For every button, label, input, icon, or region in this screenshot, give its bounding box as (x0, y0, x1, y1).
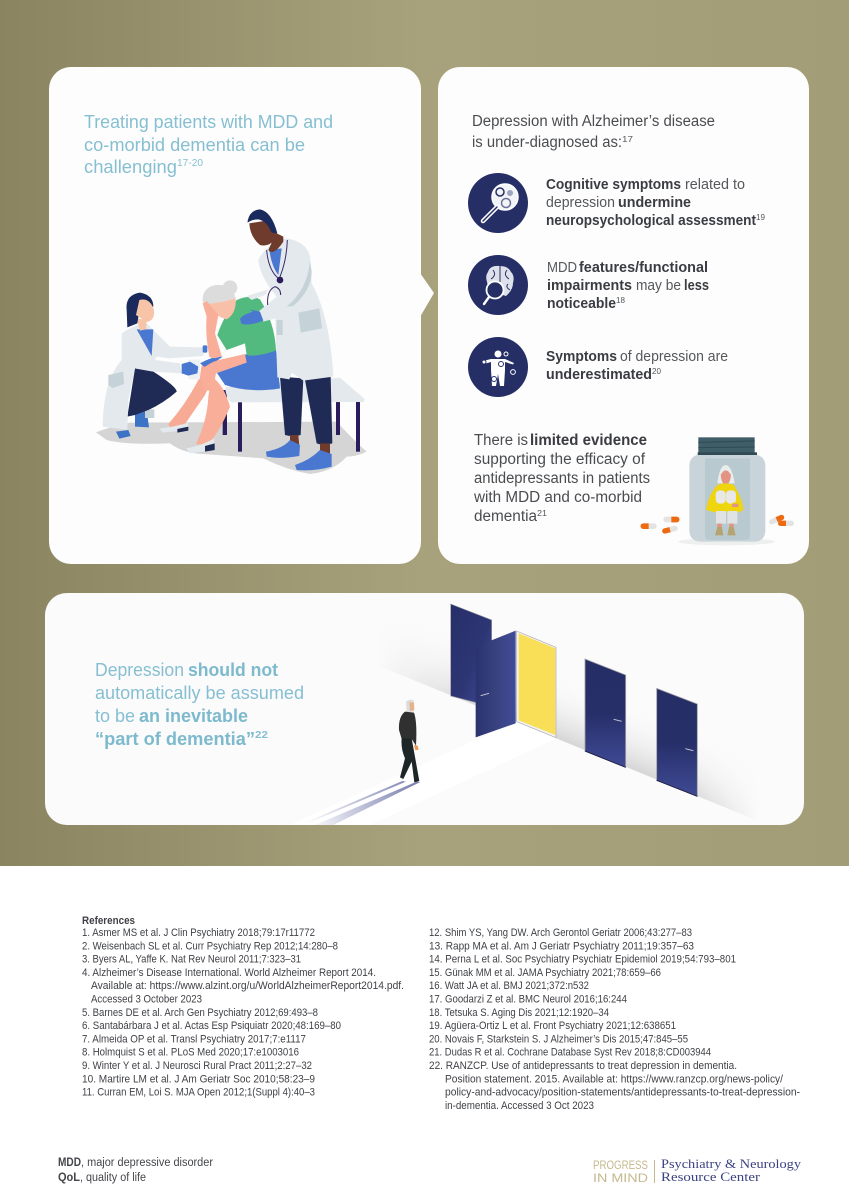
text: MDD features: noticeable (547, 296, 616, 312)
logo: Progress in Mind: IN MIND (593, 1173, 648, 1185)
references: right column: in-dementia. Accessed 3 Oct 2023 (445, 1100, 594, 1112)
heading: treating patients (84, 111, 333, 177)
panel: under-diagnosis (438, 67, 809, 564)
references: right column: 17. Goodarzi Z et al. BMC Neurol 2016;16:244 (429, 994, 627, 1006)
references: left column: 6. Santabárbara J et al. Actas Esp Psiquiatr 2020;48:169–80 (82, 1020, 341, 1032)
text: symptoms underestimated: Symptoms (546, 349, 617, 365)
text: symptoms underestimated: underestimated (546, 367, 652, 383)
text: limited evidence (473, 432, 650, 525)
heading: under-diagnosed: Depression with Alzheimer’s disease (472, 113, 715, 130)
references: left column: Available at: https://www.alzint.org/u/WorldAlzheimerReport2014.pdf. (91, 980, 404, 992)
references: right column: 15. Günak MM et al. JAMA Psychiatry 2021;78:659–66 (429, 967, 661, 979)
text: MDD features: less (684, 278, 709, 294)
illustration: person in a pill jar (640, 437, 794, 545)
heading: inevitable part of dementia: automatically be assumed (95, 682, 304, 703)
text: MDD features: MDD (547, 260, 577, 276)
icon: magnifier over cognition (468, 173, 528, 233)
abbreviations: , quality of life (80, 1172, 146, 1184)
text: cognitive symptoms: 19 (756, 212, 765, 222)
heading: inevitable part of dementia (95, 659, 304, 749)
logo: Progress in Mind (593, 1157, 802, 1185)
text: limited evidence: 21 (537, 508, 547, 518)
illustration: doctors comforting a patient (96, 209, 367, 474)
text: limited evidence: supporting the efficacy of (474, 451, 646, 468)
panel: treating patients (49, 67, 434, 564)
heading: treating patients: 17-20 (177, 158, 203, 169)
heading: inevitable part of dementia: Depression (95, 659, 184, 680)
references: left column: 8. Holmquist S et al. PLoS Med 2020;17:e1003016 (82, 1047, 299, 1059)
heading: treating patients: challenging (84, 156, 177, 177)
icon: body with symptom markers (468, 337, 528, 397)
references: left column: 5. Barnes DE et al. Arch Gen Psychiatry 2012;69:493–8 (82, 1007, 318, 1019)
text: limited evidence: dementia (474, 508, 537, 525)
text: symptoms underestimated (546, 349, 728, 383)
heading: treating patients: co-morbid dementia can be (84, 134, 305, 155)
references: right column: Position statement. 2015. Available at: https://www.ranzcp.org/news-policy/ (445, 1073, 783, 1085)
references: right column: 22. RANZCP. Use of antidepressants to treat depression in dementia. (429, 1060, 737, 1072)
heading: inevitable part of dementia: to be (95, 705, 135, 726)
text: cognitive symptoms: related to (685, 177, 745, 193)
references: right column: policy-and-advocacy/position-statements/antidepressants-to-treat-depression- (445, 1087, 800, 1099)
references: right column (429, 927, 800, 1112)
abbreviations: , major depressive disorder (81, 1157, 213, 1169)
back door (451, 604, 492, 707)
logo: Progress in Mind: PROGRESS (593, 1160, 648, 1172)
text: limited evidence: antidepressants in patients (474, 470, 650, 487)
yellow open doorway (517, 631, 556, 738)
text: limited evidence: with MDD and co-morbid (473, 489, 642, 506)
text: MDD features: 18 (616, 295, 625, 305)
references: right column: 14. Perna L et al. Soc Psychiatry Psychiatr Epidemiol 2019;54:793–801 (429, 954, 736, 966)
references: left column: 7. Almeida OP et al. Transl Psychiatry 2017;7:e1117 (82, 1033, 306, 1045)
text: symptoms underestimated: of depression are (620, 349, 728, 365)
icon: brain and magnifier (468, 255, 528, 315)
abbreviations (58, 1157, 213, 1184)
references: left column: 4. Alzheimer’s Disease International. World Alzheimer Report 2014. (82, 967, 376, 979)
references: right column: 13. Rapp MA et al. Am J Geriatr Psychiatry 2011;19:357–63 (429, 940, 694, 952)
text: limited evidence: There is (474, 432, 528, 449)
text: cognitive symptoms (546, 177, 765, 229)
abbreviations: QoL (58, 1172, 80, 1184)
walking person (399, 700, 419, 782)
heading: under-diagnosed: is under-diagnosed as: (472, 134, 622, 151)
text: MDD features: impairments (547, 278, 632, 294)
text: MDD features (547, 260, 709, 312)
references: left column: References (82, 915, 135, 927)
references: right column: 12. Shim YS, Yang DW. Arch Gerontol Geriatr 2006;43:277–83 (429, 927, 692, 939)
olive background band (0, 0, 849, 866)
references: left column: 3. Byers AL, Yaffe K. Nat Rev Neurol 2011;7:323–31 (82, 954, 301, 966)
references: right column: 16. Watt JA et al. BMJ 2021;372:n532 (429, 980, 589, 992)
text: limited evidence: limited evidence (530, 432, 647, 449)
logo: Progress in Mind: Psychiatry & Neurology (661, 1157, 802, 1171)
text: cognitive symptoms: neuropsychological assessment (546, 213, 756, 229)
heading: inevitable part of dementia: should not (188, 659, 278, 680)
text: cognitive symptoms: Cognitive symptoms (546, 177, 681, 193)
references: left column: 10. Martire LM et al. J Am Geriatr Soc 2010;58:23–9 (82, 1073, 315, 1085)
abbreviations: MDD (58, 1157, 81, 1169)
text: cognitive symptoms: depression (546, 195, 615, 211)
cast shadow (299, 781, 420, 825)
references: right column: 21. Dudas R et al. Cochrane Database Syst Rev 2018;8:CD003944 (429, 1047, 711, 1059)
references: left column: 1. Asmer MS et al. J Clin Psychiatry 2018;79:17r11772 (82, 927, 315, 939)
heading: inevitable part of dementia: 22 (255, 730, 269, 741)
references: left column (82, 915, 404, 1099)
references: left column: 11. Curran EM, Loi S. MJA Open 2012;1(Suppl 4):40–3 (82, 1087, 315, 1099)
open door (476, 631, 516, 737)
closed door (585, 659, 626, 767)
heading: under-diagnosed: 17 (622, 134, 633, 144)
closed door (657, 688, 697, 796)
text: MDD features: may be (636, 278, 681, 294)
heading: inevitable part of dementia: “part of dementia” (95, 728, 255, 749)
heading: under-diagnosed (472, 113, 715, 151)
references: right column: 20. Novais F, Starkstein S. J Alzheimer’s Dis 2015;47:845–55 (429, 1033, 688, 1045)
text: MDD features: features/functional (579, 260, 708, 276)
references: right column: 18. Tetsuka S. Aging Dis 2021;12:1920–34 (429, 1007, 609, 1019)
panel: should not be assumed (45, 572, 804, 825)
logo: Progress in Mind: Resource Center (661, 1170, 761, 1184)
references: left column: Accessed 3 October 2023 (91, 994, 202, 1006)
heading: inevitable part of dementia: an inevitable (139, 705, 248, 726)
references: left column: 9. Winter Y et al. J Neurosci Rural Pract 2011;2:27–32 (82, 1060, 312, 1072)
text: symptoms underestimated: 20 (652, 366, 661, 376)
heading: treating patients: Treating patients with MDD and (84, 111, 333, 132)
illustration: person walking towards doors (316, 604, 744, 825)
text: cognitive symptoms: undermine (618, 195, 691, 211)
references: right column: 19. Agüera-Ortiz L et al. Front Psychiatry 2021;12:638651 (429, 1020, 676, 1032)
references: left column: 2. Weisenbach SL et al. Curr Psychiatry Rep 2012;14:280–8 (82, 940, 338, 952)
